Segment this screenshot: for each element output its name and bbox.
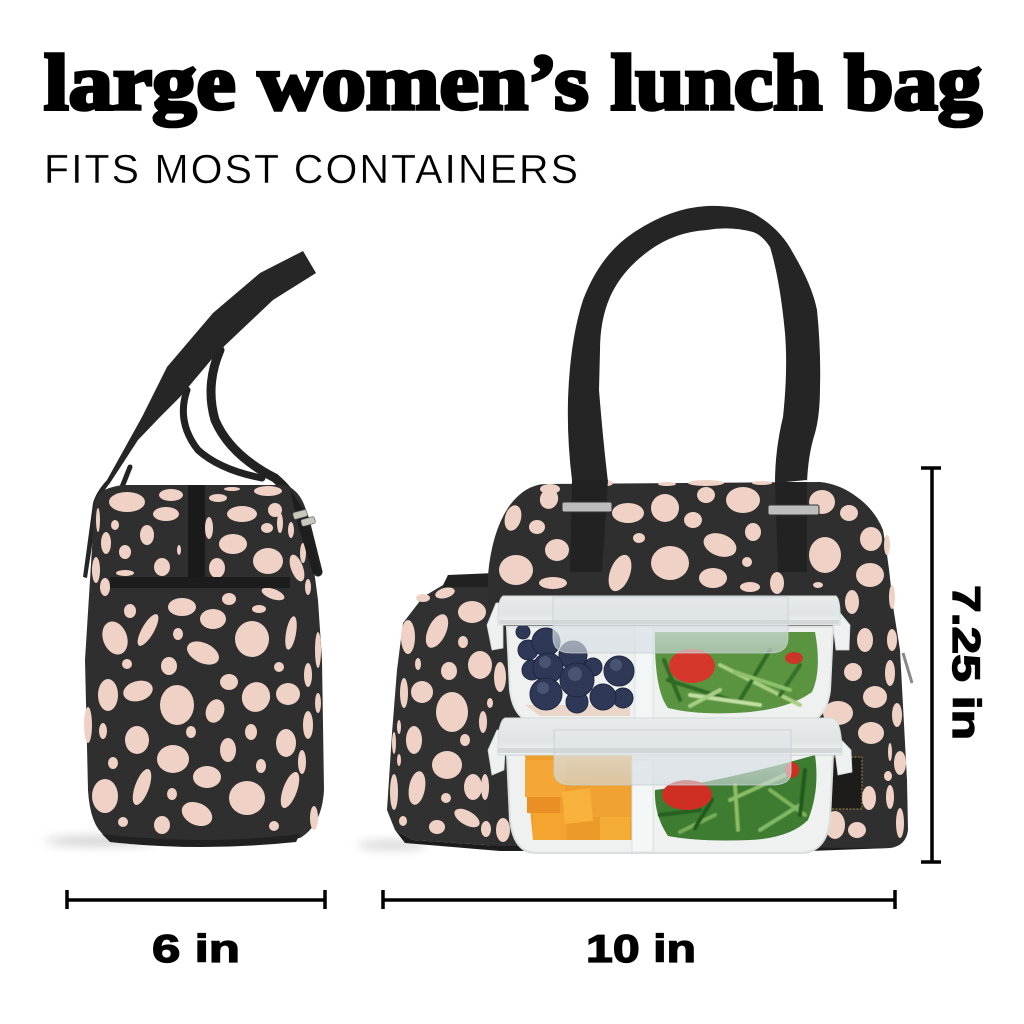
bottom divider: [632, 760, 653, 852]
side bag base: [102, 834, 300, 847]
side bag strap end: [290, 489, 320, 574]
cheese cubes: [525, 755, 632, 840]
front bag buckles: [562, 502, 819, 515]
top divider: [635, 627, 653, 722]
zip pull: [903, 653, 912, 683]
side bag front strap: [83, 251, 316, 578]
bottom glass container: [488, 718, 852, 853]
top lid tab: [553, 597, 788, 653]
blueberries: [516, 625, 634, 713]
side bag spots: [84, 486, 321, 834]
top container glass: [507, 627, 833, 723]
top clips: [487, 603, 850, 650]
front bag lower straps: [570, 480, 807, 572]
side bag buckle: [292, 509, 316, 527]
subtitle: FITS MOST CONTAINERS: [44, 146, 578, 192]
top glass container: [487, 596, 852, 853]
side view bag: [45, 251, 324, 847]
dimension: 7.25 in: 7.25 in: [944, 585, 987, 740]
front bag body: [488, 482, 908, 850]
side bag back straps: [122, 350, 318, 572]
side bag zipper: [188, 485, 205, 577]
dimension: 7.25 in: [921, 468, 987, 862]
dimension: 6 in: 6 in: [152, 928, 240, 971]
bottom container glass: [507, 755, 833, 853]
front bag spots: [390, 480, 906, 842]
side bag pocket band: [110, 577, 290, 588]
dimension: 6 in: [67, 890, 325, 971]
side bag body: [85, 485, 324, 845]
bottom lid tab: [554, 730, 791, 785]
bottom clips: [488, 730, 852, 775]
front bag handles: [568, 206, 820, 483]
front bag base: [395, 830, 890, 851]
bottom salad: [655, 755, 816, 840]
front bag side pocket: [387, 575, 520, 846]
front bag label: [830, 757, 862, 809]
dimension: 10 in: 10 in: [586, 928, 696, 971]
title: large women’s lunch bag: [44, 40, 982, 127]
pocket band: [443, 573, 495, 587]
dimension: 10 in: [383, 890, 895, 971]
front view bag: [357, 206, 912, 851]
top salad: [655, 632, 818, 713]
bottom lid: [498, 718, 842, 755]
top lid: [498, 596, 840, 625]
